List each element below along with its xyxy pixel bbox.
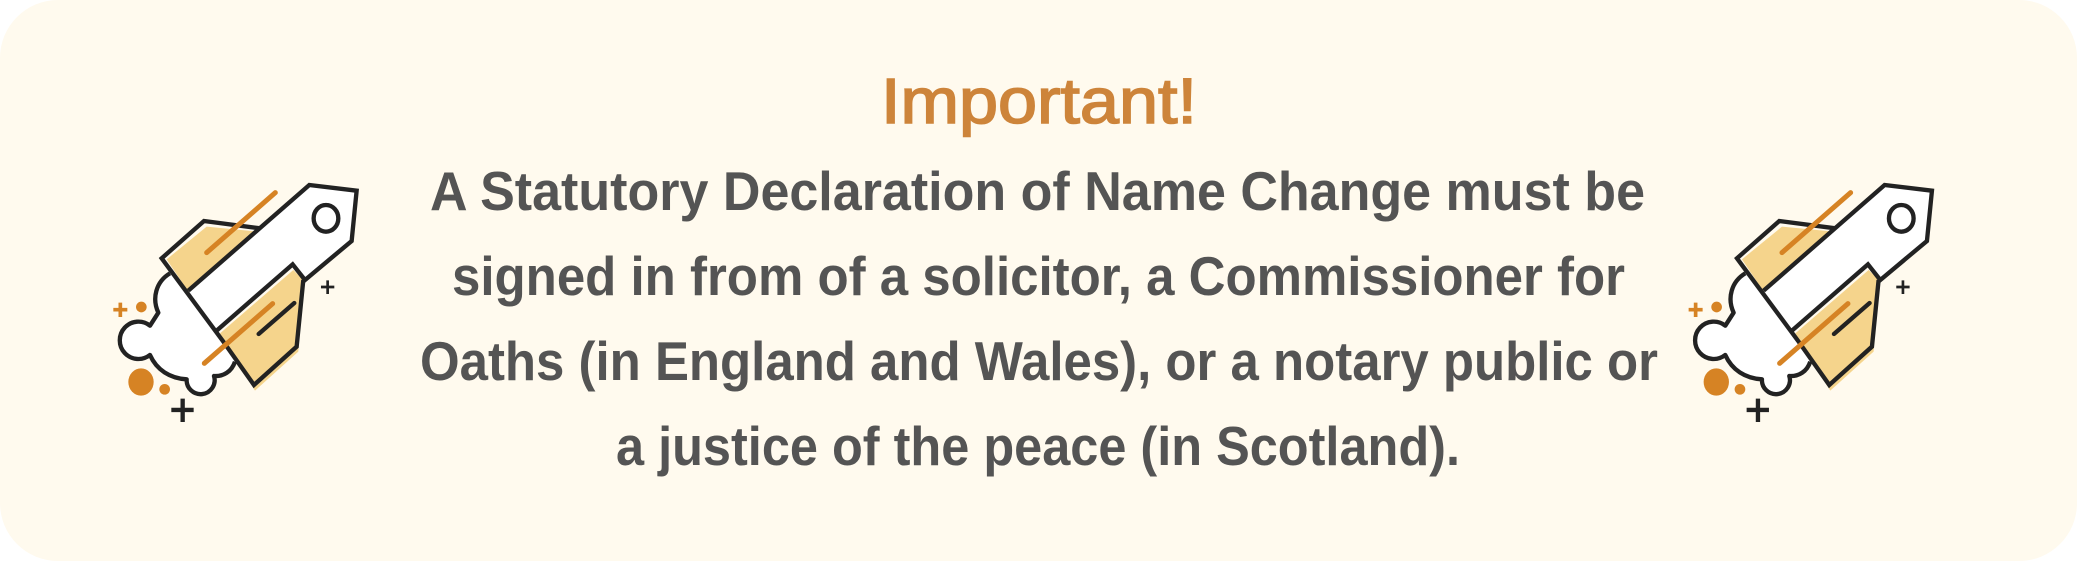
title: Important! — [881, 65, 1197, 137]
body text — [420, 160, 1658, 477]
body text: Oaths (in England and Wales), or a notary public or — [420, 330, 1658, 392]
icon: right rocket — [1689, 185, 1932, 422]
body text: a justice of the peace (in Scotland). — [616, 415, 1460, 477]
icon: left rocket — [113, 185, 357, 422]
body text: A Statutory Declaration of Name Change must be — [430, 160, 1645, 222]
body text: signed in from of a solicitor, a Commissioner for — [452, 245, 1625, 307]
